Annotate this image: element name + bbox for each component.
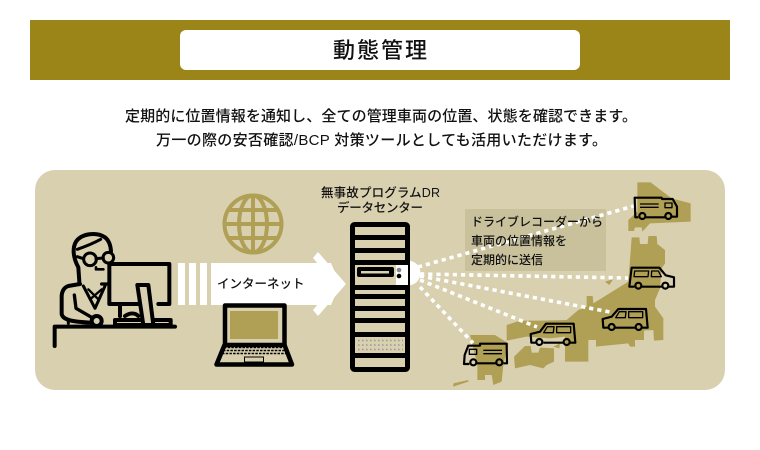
icon: van, Kansai	[531, 324, 575, 345]
label: data center: 無事故プログラムDR	[321, 185, 440, 200]
dotted signal lines	[418, 206, 634, 343]
icon: server rack	[352, 224, 408, 370]
label: internet: インターネット	[217, 277, 305, 291]
server signal origin	[396, 260, 420, 286]
description text: 万一の際の安否確認/BCP 対策ツールとしても活用いただけます。	[156, 132, 607, 149]
icon: globe	[224, 195, 282, 253]
panel: diagram background	[35, 170, 725, 390]
description text: 定期的に位置情報を通知し、全ての管理車両の位置、状態を確認できます。	[125, 107, 637, 125]
caption: dashcam: ドライブレコーダーから	[471, 214, 603, 229]
caption: dashcam: 定期的に送信	[471, 252, 543, 267]
icon: van, Kanto	[603, 309, 648, 330]
arrow: internet	[178, 252, 346, 316]
icon: person at computer	[55, 234, 175, 346]
icon: truck, Kyushu	[464, 344, 507, 365]
icon: laptop	[216, 306, 292, 364]
caption: dashcam: 車両の位置情報を	[471, 233, 567, 248]
caption: dashcam	[471, 214, 603, 267]
icon: truck, Hokkaido	[635, 198, 677, 219]
description text	[125, 107, 637, 149]
title: 動態管理	[333, 38, 427, 63]
map of Japan	[453, 182, 691, 387]
label: data center	[321, 185, 440, 215]
text box: dashcam caption background	[465, 209, 606, 271]
label: data center: データセンター	[337, 200, 423, 215]
icon: van, Tohoku	[629, 268, 674, 289]
title band	[30, 20, 730, 80]
